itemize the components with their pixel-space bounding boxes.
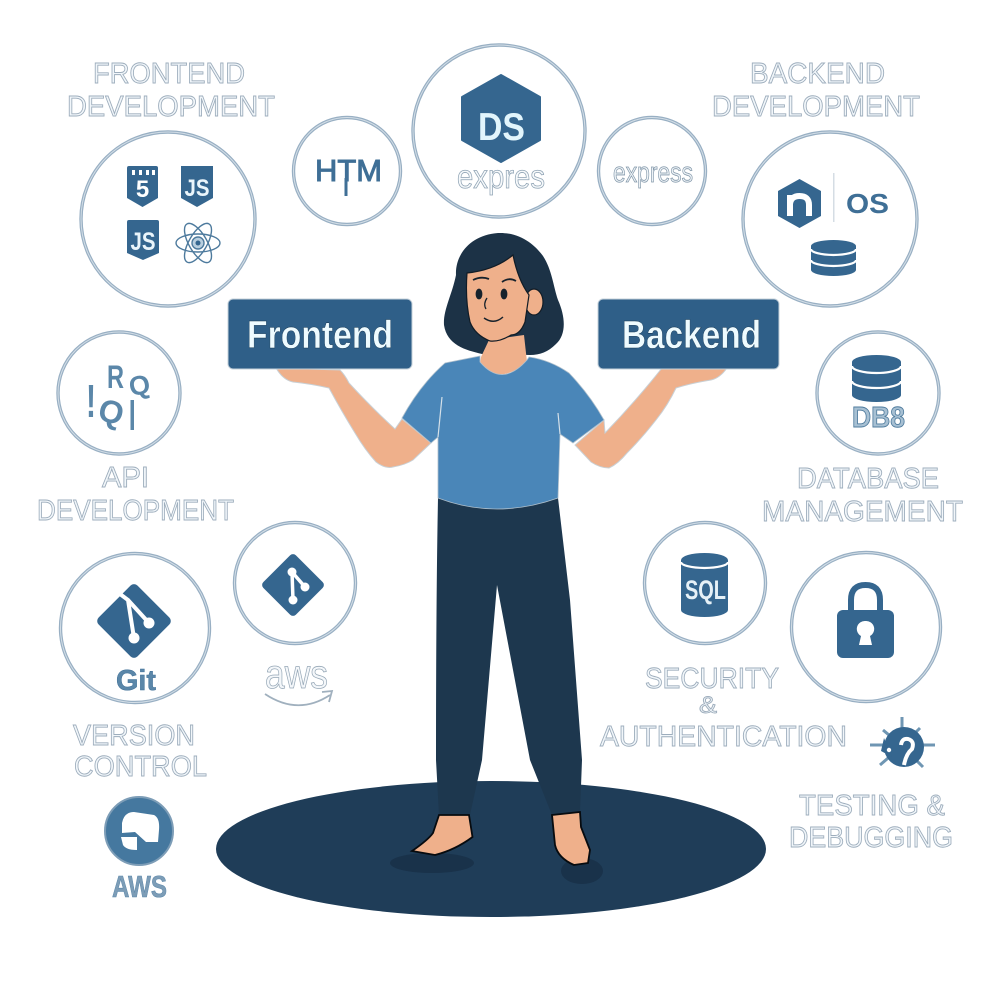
trousers bbox=[436, 498, 582, 815]
panel: ds circle bbox=[413, 45, 585, 217]
label: git: Git bbox=[116, 665, 156, 697]
foot shadows bbox=[390, 853, 603, 884]
icon: api glyphs: Q bbox=[95, 391, 128, 432]
icon: sql cylinder: SQL bbox=[685, 575, 726, 605]
right foot bbox=[552, 812, 590, 865]
icon: js shield top: JS bbox=[184, 175, 210, 202]
label: security and authentication bbox=[600, 663, 847, 753]
label: aws wordmark: aws bbox=[265, 651, 328, 697]
panel: frontend circle bbox=[81, 132, 255, 306]
icon: js shield bottom bbox=[127, 220, 159, 260]
icon: js shield bottom: JS bbox=[130, 228, 156, 256]
frontend card: Frontend bbox=[247, 314, 393, 357]
label: testing and debugging bbox=[789, 790, 953, 854]
icon: react atom bbox=[176, 219, 220, 267]
label: security and authentication: & bbox=[699, 692, 717, 719]
icon: git diamond bbox=[95, 582, 173, 660]
label: expres: expres bbox=[457, 158, 545, 195]
icon: database bbox=[811, 240, 856, 276]
icon: padlock bbox=[837, 585, 894, 658]
panel: api circle bbox=[58, 332, 180, 454]
ear bbox=[525, 289, 543, 315]
icon: api glyphs: R bbox=[107, 359, 124, 395]
panel: express circle bbox=[598, 118, 706, 224]
label: backend development bbox=[712, 58, 920, 123]
divider bbox=[833, 173, 834, 222]
panel: branch circle bbox=[234, 522, 356, 644]
panel: html circle bbox=[294, 118, 400, 224]
icon: html5 shield: 5 bbox=[136, 176, 149, 203]
label: frontend development bbox=[67, 58, 275, 123]
label: backend development: DEVELOPMENT bbox=[712, 91, 920, 123]
label: express: express bbox=[613, 157, 693, 189]
backend card: Backend bbox=[622, 314, 761, 357]
label: database management: DATABASE bbox=[797, 463, 939, 495]
face bbox=[466, 255, 529, 341]
label: version control: CONTROL bbox=[74, 751, 207, 783]
panel: database circle bbox=[817, 332, 939, 454]
label: testing and debugging: TESTING & bbox=[799, 790, 945, 822]
icon: htm text: HTM bbox=[315, 153, 382, 188]
icon: small git diamond bbox=[260, 552, 326, 618]
backend card bbox=[598, 299, 779, 369]
panel: security circle bbox=[792, 552, 940, 702]
label: version control: VERSION bbox=[73, 720, 195, 752]
icon: api glyphs: Q bbox=[126, 369, 153, 402]
icon: ds hexagon: DS bbox=[478, 106, 525, 149]
figure: developer bbox=[276, 233, 727, 865]
eyes, brows, nose and smile bbox=[473, 278, 516, 321]
label: database management bbox=[762, 463, 963, 528]
label: api development: API bbox=[102, 462, 149, 494]
icon: node hexagon bbox=[778, 179, 821, 228]
label: api development: DEVELOPMENT bbox=[37, 495, 234, 527]
left arm and hand bbox=[276, 368, 431, 467]
icon: bug bbox=[870, 717, 935, 767]
label: api development bbox=[37, 462, 234, 527]
icon: api glyphs bbox=[86, 359, 153, 432]
label: security and authentication: SECURITY bbox=[645, 663, 779, 695]
icon: aws badge bbox=[105, 797, 173, 865]
label: backend development: BACKEND bbox=[750, 58, 885, 90]
hair bbox=[444, 233, 564, 355]
panel: backend circle bbox=[743, 132, 917, 306]
icon: database bbox=[852, 355, 901, 402]
label: db8: DB8 bbox=[852, 402, 905, 434]
neck bbox=[480, 335, 527, 374]
floor ellipse bbox=[216, 781, 766, 917]
panel: sql circle bbox=[644, 522, 766, 644]
label: database management: MANAGEMENT bbox=[762, 496, 963, 528]
label: os: OS bbox=[846, 188, 889, 219]
sleeve folds bbox=[438, 397, 560, 437]
panel: git circle bbox=[60, 554, 210, 702]
label: version control bbox=[73, 720, 207, 783]
frontend card bbox=[228, 299, 412, 369]
left foot bbox=[412, 815, 472, 855]
icon: ds hexagon bbox=[462, 75, 540, 162]
label: testing and debugging: DEBUGGING bbox=[789, 822, 953, 854]
label: frontend development: DEVELOPMENT bbox=[67, 91, 275, 123]
right arm and hand bbox=[575, 368, 727, 468]
label: aws: AWS bbox=[112, 869, 167, 904]
icon: js shield top bbox=[181, 166, 213, 207]
label: security and authentication: AUTHENTICATION bbox=[600, 721, 847, 753]
t-shirt bbox=[402, 356, 604, 509]
label: frontend development: FRONTEND bbox=[93, 58, 245, 90]
icon: api glyphs: ! bbox=[86, 375, 96, 427]
icon: html5 shield bbox=[127, 166, 158, 207]
